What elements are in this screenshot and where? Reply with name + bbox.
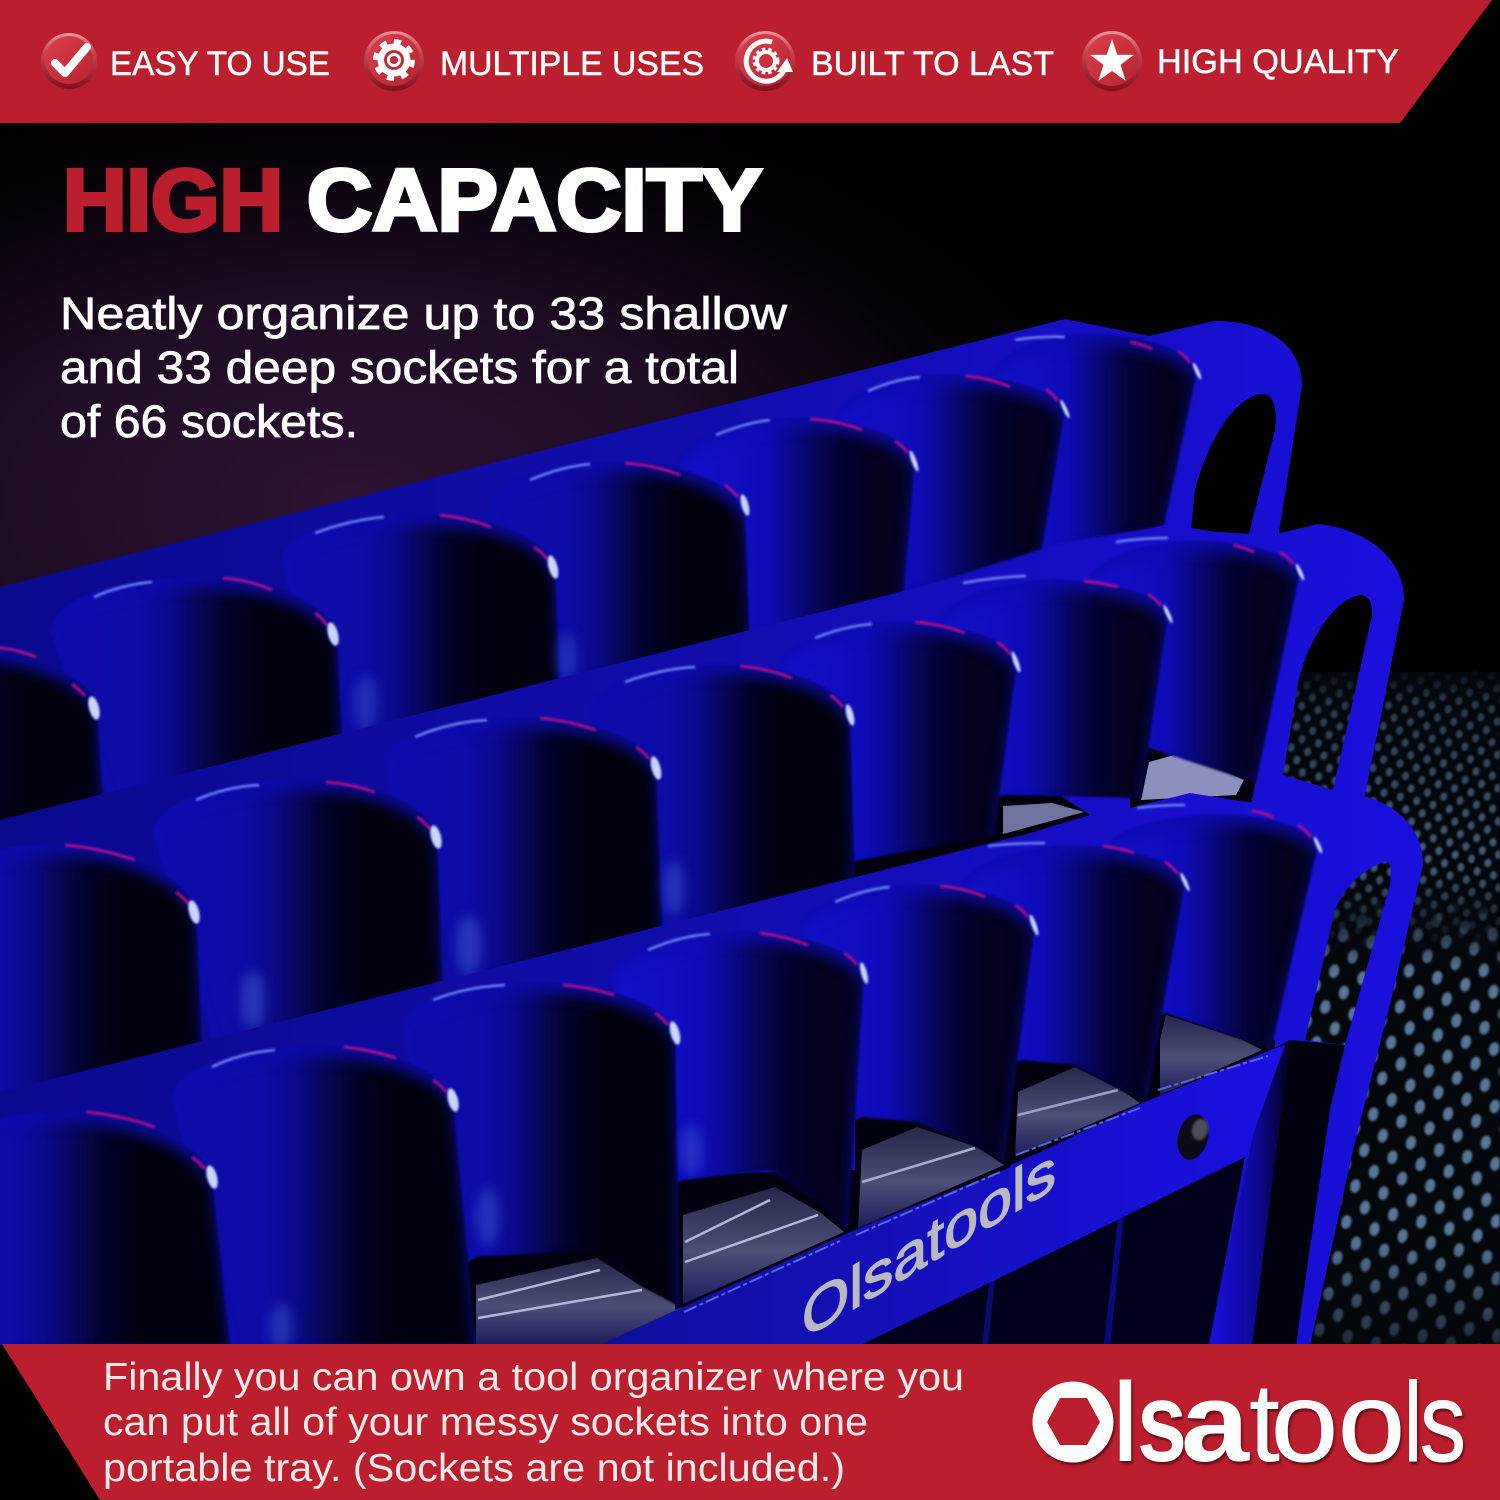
heading word: capacity: CAPACITY [307,152,762,249]
bottom text [103,1356,964,1490]
back tray [0,319,1302,900]
middle tray wall sparkle [241,860,684,1030]
brand logo: t [1249,1360,1280,1485]
printed logo on bar: Olsatools [802,1133,1056,1353]
brand logo: o [1338,1360,1405,1485]
middle tray [0,524,1404,1150]
label: high quality: HIGH QUALITY [1157,43,1399,81]
badge: high quality [1082,31,1399,91]
brand logo: l [1404,1360,1422,1485]
bottom text: Finally you can own a tool organizer where you [103,1356,964,1399]
front tray highlights [86,805,1324,1190]
description text: and 33 deep sockets for a total [60,342,739,393]
middle tray highlights [65,538,1306,925]
bottom text: portable tray. (Sockets are not included.) [103,1447,845,1490]
rivet [1173,1111,1213,1163]
label: multiple uses: MULTIPLE USES [440,45,704,83]
top banner [0,0,1492,123]
front tray [0,790,1423,1353]
middle tray cups [0,541,1300,1110]
heading [63,152,762,249]
front tray cups [0,814,1318,1345]
back tray cups [0,334,1197,840]
back tray highlights [0,337,1203,721]
label: easy to use: EASY TO USE [110,45,330,83]
badge: built to last [735,31,1054,91]
icon: check mark [41,33,97,89]
brand logo: s [1420,1360,1466,1485]
badge: easy to use [41,33,330,89]
middle tray rim and handle [0,524,1404,1150]
label: built to last: BUILT TO LAST [811,45,1054,83]
brand logo: s [1137,1360,1187,1485]
brand logo: a [1181,1360,1250,1485]
badge: multiple uses [364,31,704,91]
front tray bar [600,1045,1285,1345]
description text: of 66 sockets. [60,396,358,447]
back tray wall sparkle [354,633,577,731]
icon: star [1082,31,1142,91]
front tray rim and handle [0,790,1423,1345]
bottom banner [2,1344,1500,1500]
description text: Neatly organize up to 33 shallow [60,288,788,339]
heading word: high: HIGH [63,152,283,249]
brand logo: l [1114,1360,1137,1485]
brand logo: o [1271,1360,1338,1485]
icon: gear [364,31,424,91]
middle tray socket gaps [845,740,1256,880]
brand logo [1032,1360,1466,1485]
bottom text: can put all of your messy sockets into one [103,1401,868,1444]
carbon fibre surface [1280,668,1500,1350]
brand logo: O [1032,1360,1113,1485]
description text [60,288,788,447]
front tray wall sparkle [269,1124,702,1351]
front tray socket rail [460,1005,1275,1345]
bar glints [684,1056,1268,1312]
front frame below the bar [860,1040,1345,1345]
icon: cycle gear [735,31,795,91]
back tray rim and handle [0,319,1302,900]
